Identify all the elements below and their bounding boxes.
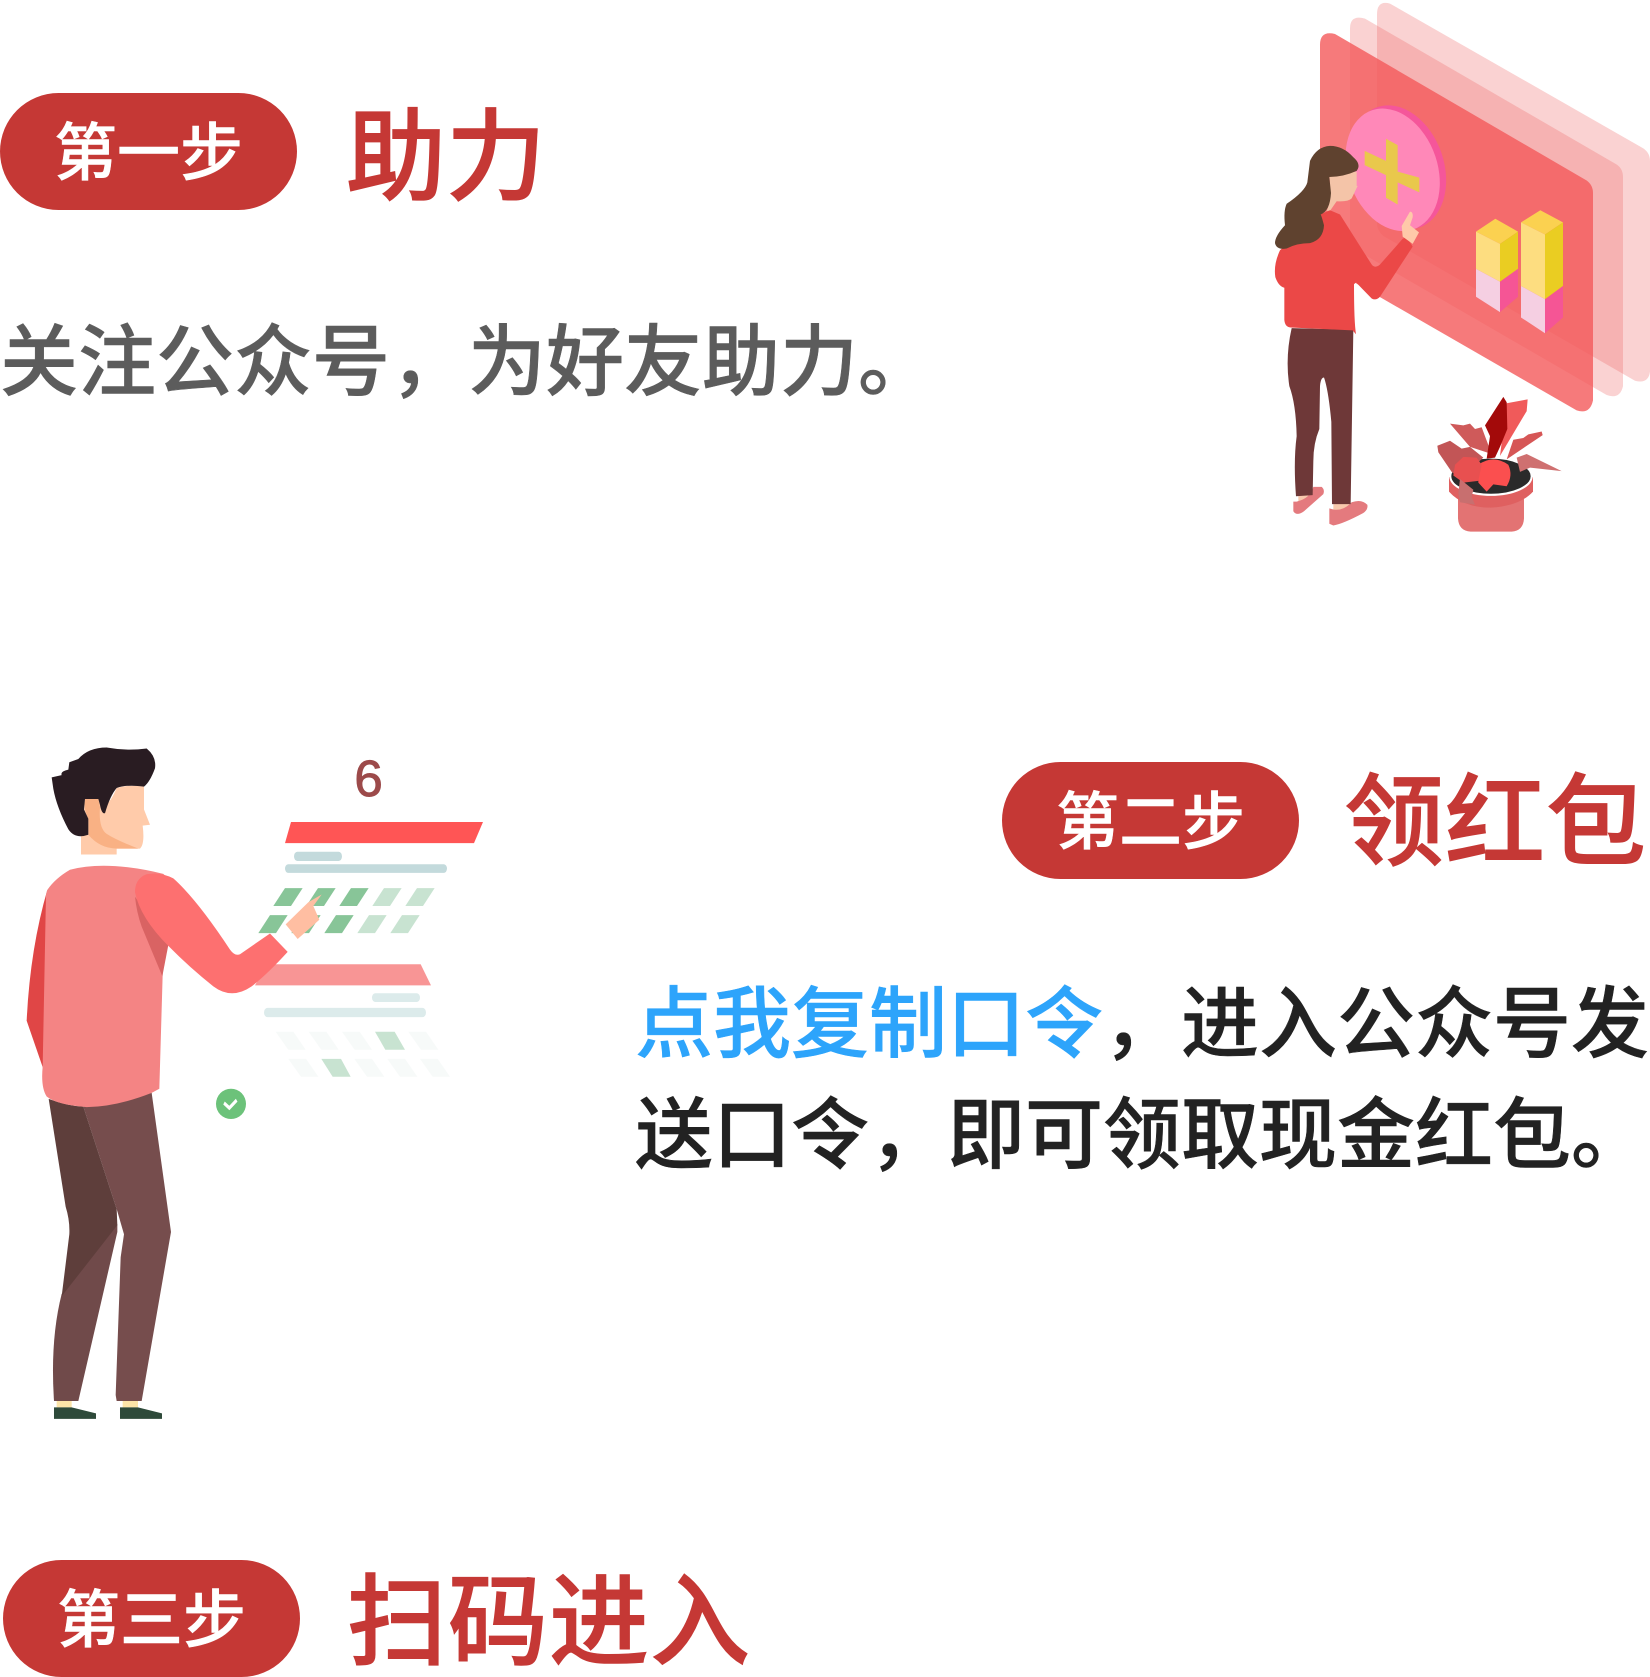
chart: isometric bar two [1521, 210, 1563, 333]
icon: green check [216, 1089, 246, 1119]
chart: isometric bar one [1476, 219, 1518, 312]
panel: back sheet [1377, 3, 1650, 382]
step three badge: 第三步 [57, 1586, 246, 1656]
step one badge: 第一步 [54, 119, 243, 189]
panel: middle sheet [1350, 18, 1623, 396]
calendar: lower text lines [264, 993, 426, 1017]
calendar: upper text lines [285, 852, 447, 873]
step two description: 点我复制口令，进入公众号发 [635, 980, 1649, 1068]
step one heading: 助力 [346, 102, 546, 214]
step two badge: 第二步 [1056, 788, 1245, 858]
step one description: 关注公众号，为好友助力。 [0, 318, 936, 406]
figure: man [27, 748, 322, 1419]
calendar: header bar [285, 822, 483, 843]
step two description [635, 980, 1649, 1179]
icon: pink plus button [1328, 89, 1464, 247]
calendar: lower date tiles [276, 1032, 450, 1077]
calendar: second header bar [255, 964, 431, 985]
step two heading: 领红包 [1344, 767, 1647, 879]
figure: woman [1275, 146, 1419, 526]
step three heading: 扫码进入 [347, 1567, 751, 1677]
panel: front sheet [1320, 33, 1593, 411]
step three badge [3, 1560, 300, 1677]
step two badge [1002, 762, 1299, 879]
calendar date number: 6 [354, 750, 383, 807]
calendar: upper date tiles [258, 888, 435, 933]
step one badge [0, 93, 297, 210]
icon: potted plant [1437, 397, 1562, 532]
step two description: 送口令，即可领取现金红包。 [635, 1091, 1649, 1179]
